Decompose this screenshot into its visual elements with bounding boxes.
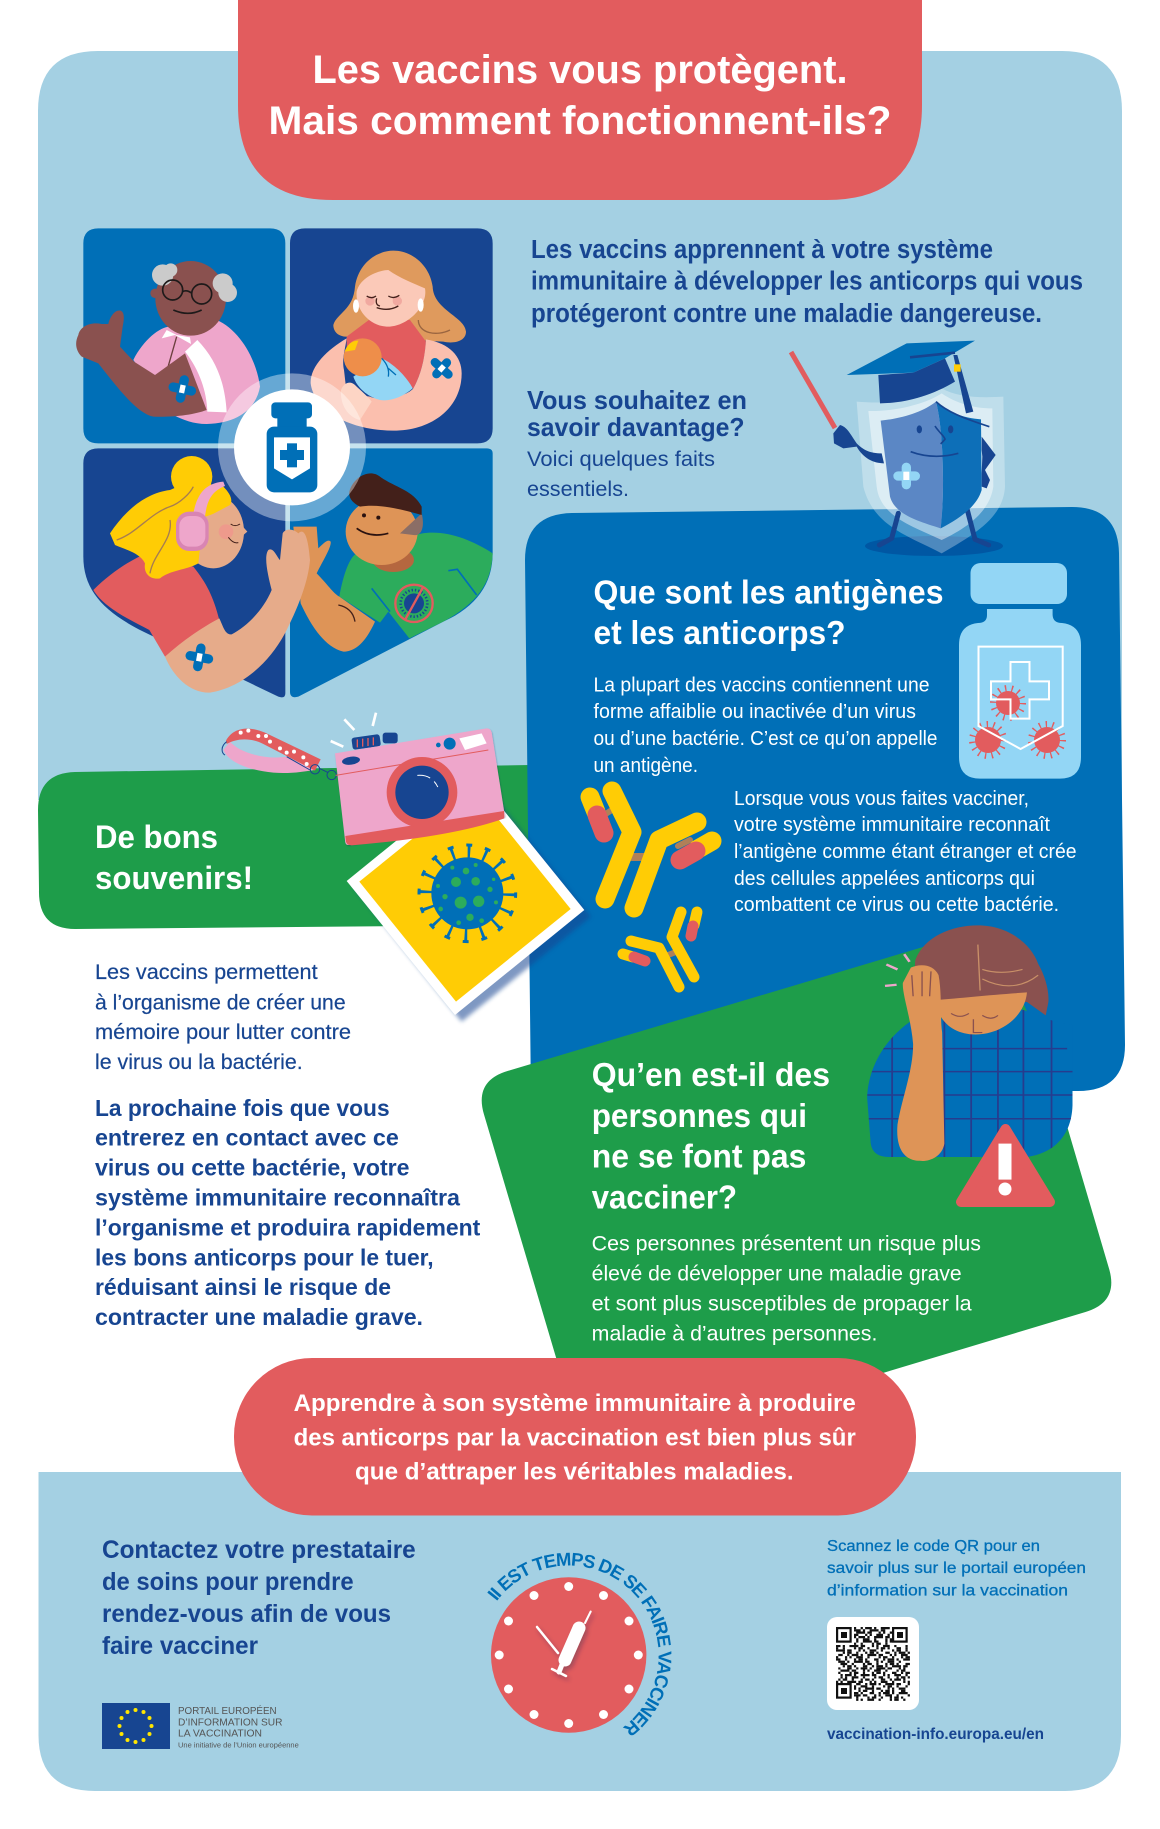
person: mother holding baby xyxy=(311,251,466,431)
text: risk for unvaccinated people: maladie à d’autres personnes. xyxy=(592,1322,877,1345)
text: want to know more: savoir davantage? xyxy=(527,412,744,442)
text: risk for unvaccinated people: Ces personnes présentent un risque plus xyxy=(592,1233,981,1256)
text: want to know more: Voici quelques faits xyxy=(527,448,715,471)
illustration: woman with headache xyxy=(862,925,1073,1161)
heading: unvaccinated people xyxy=(592,1057,830,1217)
text: antigen explanation: un antigène. xyxy=(594,754,698,777)
text: antibody explanation: Lorsque vous vous faites vacciner, xyxy=(734,787,1029,810)
heading: antigens and antibodies: et les anticorps? xyxy=(594,615,846,652)
panel: title banner xyxy=(238,0,922,200)
title: Les vaccins vous protègent. xyxy=(312,48,848,92)
text: intro: immunitaire à développer les anticorps qui vous xyxy=(531,268,1083,296)
panel: light blue upper background xyxy=(38,51,1122,800)
callout: key message pill: que d’attraper les véritables maladies. xyxy=(355,1459,794,1486)
text: next contact explanation: entrerez en contact avec ce xyxy=(95,1125,399,1151)
text: next contact explanation: système immunitaire reconnaîtra xyxy=(95,1184,461,1210)
panel: good memories green banner xyxy=(38,765,530,929)
icon: clock with syringe hand xyxy=(491,1577,646,1733)
text: risk for unvaccinated people: et sont plus susceptibles de propager la xyxy=(592,1292,972,1315)
text: antibody explanation: combattent ce virus ou cette bactérie. xyxy=(734,893,1059,916)
text: scan QR xyxy=(827,1538,1086,1599)
heading: unvaccinated people: personnes qui xyxy=(592,1098,807,1135)
illustration: shield of four vaccinated people xyxy=(76,228,493,697)
title xyxy=(268,48,892,143)
callout: key message pill: des anticorps par la vaccination est bien plus sûr xyxy=(294,1425,856,1452)
text: portal URL: vaccination-info.europa.eu/en xyxy=(827,1726,1044,1743)
illustration: camera and virus photo xyxy=(222,713,591,1022)
panel: footer background xyxy=(38,1472,1121,1791)
panel: antigens and antibodies xyxy=(525,507,1125,1100)
logo: EU flag and portal name: Une initiative de l’Union européenne xyxy=(178,1743,299,1750)
icon: small antibody xyxy=(623,912,697,987)
text: scan QR: d’information sur la vaccination xyxy=(827,1582,1068,1599)
text: next contact explanation: les bons anticorps pour le tuer, xyxy=(95,1244,434,1270)
text: next contact explanation: réduisant ainsi le risque de xyxy=(95,1274,391,1300)
person: elderly man with thumb up xyxy=(76,261,260,424)
text: next contact explanation: l’organisme et produira rapidement xyxy=(95,1214,480,1240)
text: next contact explanation: virus ou cette bactérie, votre xyxy=(95,1155,410,1181)
heading: antigens and antibodies xyxy=(594,574,944,652)
text: want to know more: essentiels. xyxy=(527,478,629,501)
text: antigen explanation: ou d’une bactérie. C’est ce qu’on appelle xyxy=(594,727,938,750)
text: contact your provider: Contactez votre prestataire xyxy=(102,1536,416,1564)
callout: key message pill: Apprendre à son système immunitaire à produire xyxy=(294,1390,856,1417)
heading: good memories xyxy=(95,819,253,896)
text: vaccine memory: Les vaccins permettent xyxy=(95,961,318,984)
text: antibody explanation: des cellules appelées anticorps qui xyxy=(734,867,1035,890)
heading: antigens and antibodies: Que sont les antigènes xyxy=(594,574,944,611)
text: next contact explanation xyxy=(95,1095,480,1330)
text: next contact explanation: contracter une maladie grave. xyxy=(95,1304,423,1330)
text: risk for unvaccinated people xyxy=(592,1233,981,1345)
text: vaccine memory: à l’organisme de créer une xyxy=(95,991,346,1014)
text: scan QR: savoir plus sur le portail européen xyxy=(827,1560,1086,1577)
text: antibody explanation: votre système immunitaire reconnaît xyxy=(734,813,1050,836)
text: contact your provider: de soins pour prendre xyxy=(102,1568,354,1596)
heading: good memories: De bons xyxy=(95,819,218,855)
title: Mais comment fonctionnent-ils? xyxy=(268,99,892,143)
text: want to know more xyxy=(527,385,747,501)
text: vaccine memory xyxy=(95,961,351,1074)
person: young man high-fiving xyxy=(293,473,493,652)
text: risk for unvaccinated people: élevé de développer une maladie grave xyxy=(592,1263,962,1286)
text: contact your provider: rendez-vous afin de vous xyxy=(102,1600,391,1628)
heading: good memories: souvenirs! xyxy=(95,860,253,896)
text: antigen explanation xyxy=(594,674,938,777)
text: antigen explanation: La plupart des vaccins contiennent une xyxy=(594,674,930,696)
icon: QR code xyxy=(827,1617,919,1710)
text: antibody explanation: l’antigène comme étant étranger et crée xyxy=(734,840,1076,863)
logo: EU flag and portal name: LA VACCINATION xyxy=(178,1728,262,1740)
heading: unvaccinated people: ne se font pas xyxy=(592,1139,806,1176)
text: contact your provider: faire vacciner xyxy=(102,1632,258,1660)
heading: unvaccinated people: vacciner? xyxy=(592,1180,737,1217)
text: contact your provider xyxy=(102,1536,416,1660)
heading: unvaccinated people: Qu’en est-il des xyxy=(592,1057,830,1094)
text: intro: Les vaccins apprennent à votre système xyxy=(531,236,993,264)
icon: large antibody xyxy=(590,791,712,908)
text: curved time to vaccinate: II EST TEMPS DE SE FAIRE VACCINER xyxy=(487,1552,672,1736)
callout: key message pill xyxy=(234,1358,916,1516)
text: scan QR: Scannez le code QR pour en xyxy=(827,1538,1040,1555)
text: intro xyxy=(531,236,1083,328)
person: woman with headphones xyxy=(93,456,310,693)
icon: mascot pointer xyxy=(791,352,835,428)
icon: vaccine vial with viruses xyxy=(959,563,1081,779)
logo: EU flag and portal name: PORTAIL EUROPÉEN xyxy=(178,1704,277,1717)
text: antibody explanation xyxy=(734,787,1076,916)
text: vaccine memory: le virus ou la bactérie. xyxy=(95,1051,303,1074)
logo: EU flag and portal name: D’INFORMATION SUR xyxy=(178,1716,283,1728)
text: want to know more: Vous souhaitez en xyxy=(527,385,747,415)
panel: unvaccinated people green card xyxy=(482,936,1111,1462)
logo: EU flag and portal name xyxy=(102,1703,299,1750)
text: antigen explanation: forme affaiblie ou inactivée d’un virus xyxy=(594,700,916,723)
text: next contact explanation: La prochaine fois que vous xyxy=(95,1095,390,1121)
icon: warning triangle xyxy=(961,1129,1050,1202)
text: intro: protégeront contre une maladie dangereuse. xyxy=(531,300,1042,328)
icon: central vaccine bottle xyxy=(218,373,366,521)
text: vaccine memory: mémoire pour lutter contre xyxy=(95,1021,351,1044)
illustration: shield mascot teacher xyxy=(833,341,1005,556)
